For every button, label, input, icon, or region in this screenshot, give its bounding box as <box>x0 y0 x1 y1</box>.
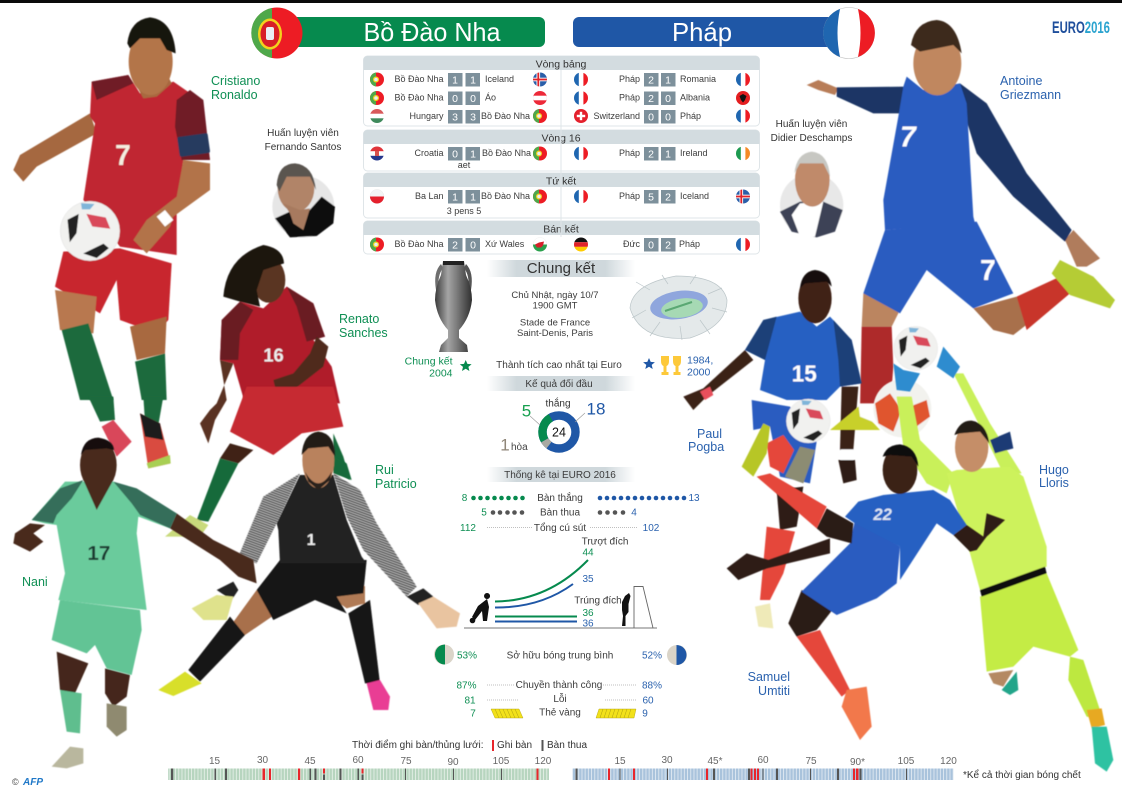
heading: Euro 2016 stats: Thống kê tại EURO 2016 <box>504 469 616 481</box>
stat: goals conceded: 5 <box>481 508 487 518</box>
stat: goals scored: 8 <box>462 493 468 504</box>
timeline: France: 60 <box>757 755 769 766</box>
heading: final <box>487 260 635 277</box>
panel: quarter-finals: Ba Lan <box>415 191 444 201</box>
chart: shots off and on target: Trúng đích <box>574 596 622 606</box>
chart: shots off and on target: Trượt đích <box>582 536 628 548</box>
timeline: Portugal: 15 <box>209 756 220 767</box>
stat: yellow cards: 9 <box>642 708 648 720</box>
panel: group stage: 1 <box>452 74 458 86</box>
panel: group stage: 2 <box>648 74 654 86</box>
best Euro result: Portugal <box>405 356 472 380</box>
player: Nani <box>13 438 257 768</box>
coach: Fernando Santos <box>272 163 335 238</box>
final details: Stade de France <box>520 318 590 328</box>
panel: quarter-finals: Pháp <box>619 191 640 201</box>
player: Cristiano Ronaldo: 7 <box>115 140 131 172</box>
stat: pass completion <box>456 679 662 692</box>
player: Antoine Griezmann: 7 <box>980 255 996 287</box>
panel: semi-finals: Pháp <box>679 239 700 249</box>
panel: group stage: 0 <box>648 112 654 124</box>
final details: 1900 GMT <box>533 300 578 312</box>
panel: quarter-finals: 1 <box>470 192 476 204</box>
player: Renato Sanches lower body <box>165 387 350 537</box>
timeline: Portugal <box>168 755 552 780</box>
panel: semi-finals: 0 <box>648 240 654 252</box>
header: Portugal <box>251 8 545 58</box>
stat: total shots: 102 <box>643 523 660 534</box>
final details: Saint-Denis, Paris <box>517 328 593 339</box>
panel: quarter-finals: Bồ Đào Nha <box>481 191 530 201</box>
stat: yellow cards <box>470 708 648 720</box>
player: Hugo Lloris <box>893 326 1113 772</box>
donut chart: head to head: thắng <box>545 396 571 410</box>
donut chart: head to head: hòa <box>511 442 528 453</box>
panel: semi-finals: Bán kết <box>543 224 579 236</box>
chart: shots off and on target: 44 <box>582 548 594 558</box>
label: Cristiano Ronaldo: Cristiano <box>211 74 260 88</box>
label: Cristiano Ronaldo: Ronaldo <box>211 88 258 102</box>
panel: quarter-finals: Tứ kết <box>546 176 576 188</box>
best Euro result: France: 1984, <box>687 354 713 366</box>
heading: final: Chung kết <box>527 260 596 277</box>
chart: shots off and on target: 35 <box>582 574 594 585</box>
panel: round of 16: aet <box>458 160 471 170</box>
timeline: France: 30 <box>661 755 673 766</box>
label: Rui Patricio: Rui <box>375 463 394 477</box>
chart: shots off and on target: 36 <box>582 608 594 619</box>
heading: head to head <box>487 376 635 391</box>
final details: Chủ Nhật, ngày 10/7 <box>511 290 599 301</box>
panel: semi-finals: Xứ Wales <box>485 239 525 249</box>
panel: round of 16: 0 <box>452 148 458 160</box>
label: Hugo Lloris: Hugo <box>1039 463 1069 477</box>
label: Hugo Lloris: Lloris <box>1039 476 1069 490</box>
panel: quarter-finals <box>364 173 760 218</box>
stat: goals conceded: Bàn thua <box>540 508 580 518</box>
coach: Didier Deschamps <box>780 152 843 237</box>
stat: goals scored <box>462 491 700 504</box>
donut chart: head to head: 24 <box>552 426 566 440</box>
panel: group stage: Hungary <box>409 111 444 121</box>
panel: round of 16: 1 <box>470 148 476 160</box>
panel: round of 16: Pháp <box>619 148 640 158</box>
label: Rui Patricio: Patricio <box>375 477 417 491</box>
panel: round of 16: Bồ Đào Nha <box>482 148 531 158</box>
stat: goals scored: 13 <box>688 493 700 504</box>
credit: AFP: © <box>12 777 19 787</box>
best Euro result: France: 2000 <box>687 366 711 378</box>
timeline: Portugal: 30 <box>257 755 268 766</box>
best Euro result: Portugal: 2004 <box>429 368 453 380</box>
panel: semi-finals: 2 <box>452 240 458 252</box>
stat: pass completion: 87% <box>456 680 477 692</box>
stat: yellow cards: 7 <box>470 708 476 720</box>
header: France <box>573 8 875 58</box>
panel: round of 16: 1 <box>665 148 671 160</box>
label: Antoine Griezmann: Griezmann <box>1000 88 1061 102</box>
panel: round of 16: Ireland <box>680 148 708 158</box>
panel: group stage: 3 <box>452 112 458 124</box>
player: Samuel Umtiti: 22 <box>872 505 893 524</box>
best Euro result label: Thành tích cao nhất tại Euro <box>496 359 622 371</box>
donut chart: head to head <box>500 396 605 454</box>
panel: group stage: 0 <box>470 93 476 105</box>
heading: Euro 2016 stats <box>487 467 635 482</box>
Euro 2016 logo: EURO2016 <box>1052 18 1110 37</box>
player: Paul Pogba <box>683 270 862 628</box>
stat: fouls: Lỗi <box>553 692 567 705</box>
panel: group stage: Vòng bảng <box>536 58 587 70</box>
label: coach Didier Deschamps: Huấn luyện viên <box>776 118 847 130</box>
panel: group stage: 0 <box>665 93 671 105</box>
player: Rui Patricio <box>158 432 460 710</box>
panel: group stage: 0 <box>665 112 671 124</box>
panel: quarter-finals: 5 <box>648 192 654 204</box>
player: Rui Patricio: 1 <box>307 532 316 549</box>
player: Antoine Griezmann: 7 <box>900 122 917 154</box>
stat: pass completion: Chuyền thành công <box>516 679 602 691</box>
panel: semi-finals: 2 <box>665 240 671 252</box>
panel: round of 16: Vòng 16 <box>541 132 581 144</box>
stat: fouls: 60 <box>642 696 654 706</box>
donut chart: head to head: 5 <box>522 402 531 420</box>
stat: possession <box>434 644 687 665</box>
legend: goal timeline: Ghi bàn <box>497 740 532 751</box>
player: Cristiano Ronaldo boots <box>88 397 171 468</box>
stat: possession: 53% <box>457 650 477 662</box>
panel: group stage: Áo <box>485 92 496 102</box>
panel: group stage: 1 <box>665 74 671 86</box>
player: Renato Sanches <box>200 245 340 443</box>
stat: total shots: 112 <box>460 523 476 534</box>
panel: quarter-finals: 1 <box>452 192 458 204</box>
chart: shots off and on target: 36 <box>582 618 594 630</box>
donut chart: head to head: 18 <box>587 400 605 418</box>
label: Samuel Umtiti: Samuel <box>748 670 790 684</box>
timeline: Portugal: 60 <box>352 755 364 766</box>
timeline: Portugal: 75 <box>400 756 412 767</box>
label: Renato Sanches: Renato <box>339 312 379 326</box>
timeline: Portugal: 90 <box>447 757 459 768</box>
stat: pass completion: 88% <box>642 680 662 692</box>
legend: goal timeline <box>352 739 587 751</box>
timeline: Portugal: 120 <box>535 756 552 767</box>
timeline: Portugal: 105 <box>493 756 510 767</box>
label: Paul Pogba: Pogba <box>688 440 724 454</box>
label: Paul Pogba: Paul <box>697 427 722 441</box>
credit: AFP <box>12 777 43 788</box>
panel: group stage: 0 <box>452 93 458 105</box>
panel: round of 16: 2 <box>648 148 654 160</box>
header: Portugal: Bồ Đào Nha <box>364 17 501 47</box>
timeline: Portugal: 45 <box>304 756 316 767</box>
footnote: *Kể cả thời gian bóng chết <box>963 769 1081 781</box>
stat: total shots <box>460 522 660 534</box>
panel: group stage: Bồ Đào Nha <box>394 74 444 84</box>
final details <box>511 290 599 339</box>
stat: total shots: Tổng cú sút <box>534 522 586 534</box>
best Euro result: France <box>643 354 713 378</box>
legend: goal timeline: Thời điểm ghi bàn/thủng lưới: <box>352 739 484 751</box>
panel: semi-finals: 0 <box>470 240 476 252</box>
stat: possession: 52% <box>642 650 662 662</box>
stadium <box>630 275 727 340</box>
panel: group stage: Bồ Đào Nha <box>394 92 444 102</box>
panel: group stage: Romania <box>680 74 716 84</box>
legend: goal timeline: Bàn thua <box>547 740 587 751</box>
credit: AFP: AFP <box>22 777 43 788</box>
ball and keeper: Griezmann boot and match ball <box>830 379 931 437</box>
panel: group stage: Bồ Đào Nha <box>481 111 530 121</box>
label: Antoine Griezmann: Antoine <box>1000 74 1042 88</box>
trophy <box>435 261 472 352</box>
heading: head to head: Kế quả đối đầu <box>525 378 593 390</box>
panel: group stage: Switzerland <box>593 111 640 121</box>
panel: quarter-finals: 2 <box>665 192 671 204</box>
player: Samuel Umtiti <box>727 444 1005 740</box>
label: Nani: Nani <box>22 575 48 589</box>
panel: group stage: Pháp <box>680 111 701 121</box>
stat: possession: Sở hữu bóng trung bình <box>507 650 613 662</box>
player: Paul Pogba: 15 <box>792 361 817 387</box>
stat: goals conceded: 4 <box>631 508 637 518</box>
timeline: France: 120 <box>940 756 957 767</box>
player: Renato Sanches: 16 <box>263 345 284 366</box>
top black bar <box>0 0 1122 3</box>
player: Cristiano Ronaldo <box>13 17 210 400</box>
panel: group stage: 2 <box>648 93 654 105</box>
panel: semi-finals <box>364 221 760 254</box>
panel: group stage: 1 <box>470 74 476 86</box>
timeline: France <box>572 755 957 780</box>
panel: semi-finals: Bồ Đào Nha <box>394 239 444 249</box>
player: Nani: 17 <box>87 542 110 565</box>
stat: goals scored: Bàn thắng <box>537 491 583 504</box>
panel: group stage: Pháp <box>619 92 640 102</box>
label: Samuel Umtiti: Umtiti <box>758 684 790 698</box>
panel: semi-finals: Đức <box>623 239 640 249</box>
header: France: Pháp <box>672 17 732 47</box>
panel: round of 16 <box>364 130 760 171</box>
timeline: France: 15 <box>614 756 626 767</box>
stat: goals conceded <box>481 508 637 518</box>
stat: fouls <box>464 692 654 706</box>
panel: group stage: Pháp <box>619 74 640 84</box>
chart: shots off and on target <box>464 536 657 630</box>
label: coach Fernando Santos: Fernando Santos <box>265 142 341 153</box>
player: Antoine Griezmann <box>807 20 1115 410</box>
donut chart: head to head: 1 <box>500 436 510 454</box>
timeline: France: 105 <box>898 756 915 767</box>
label: coach Fernando Santos: Huấn luyện viên <box>267 127 339 139</box>
panel: group stage: Iceland <box>485 74 514 84</box>
panel: quarter-finals: 3 pens 5 <box>447 206 481 216</box>
stat: fouls: 81 <box>464 696 476 706</box>
timeline: France: 75 <box>805 756 817 767</box>
panel: round of 16: Croatia <box>414 148 444 158</box>
label: Renato Sanches: Sanches <box>339 326 388 340</box>
panel: group stage: 3 <box>470 112 476 124</box>
stat: yellow cards: Thẻ vàng <box>539 708 581 718</box>
panel: group stage <box>364 56 760 126</box>
panel: group stage: Albania <box>680 92 710 102</box>
panel: quarter-finals: Iceland <box>680 191 709 201</box>
best Euro result: Portugal: Chung kết <box>405 356 453 368</box>
label: coach Didier Deschamps: Didier Deschamps <box>771 133 852 144</box>
timeline: France: 90* <box>850 757 865 768</box>
timeline: France: 45* <box>707 756 723 767</box>
